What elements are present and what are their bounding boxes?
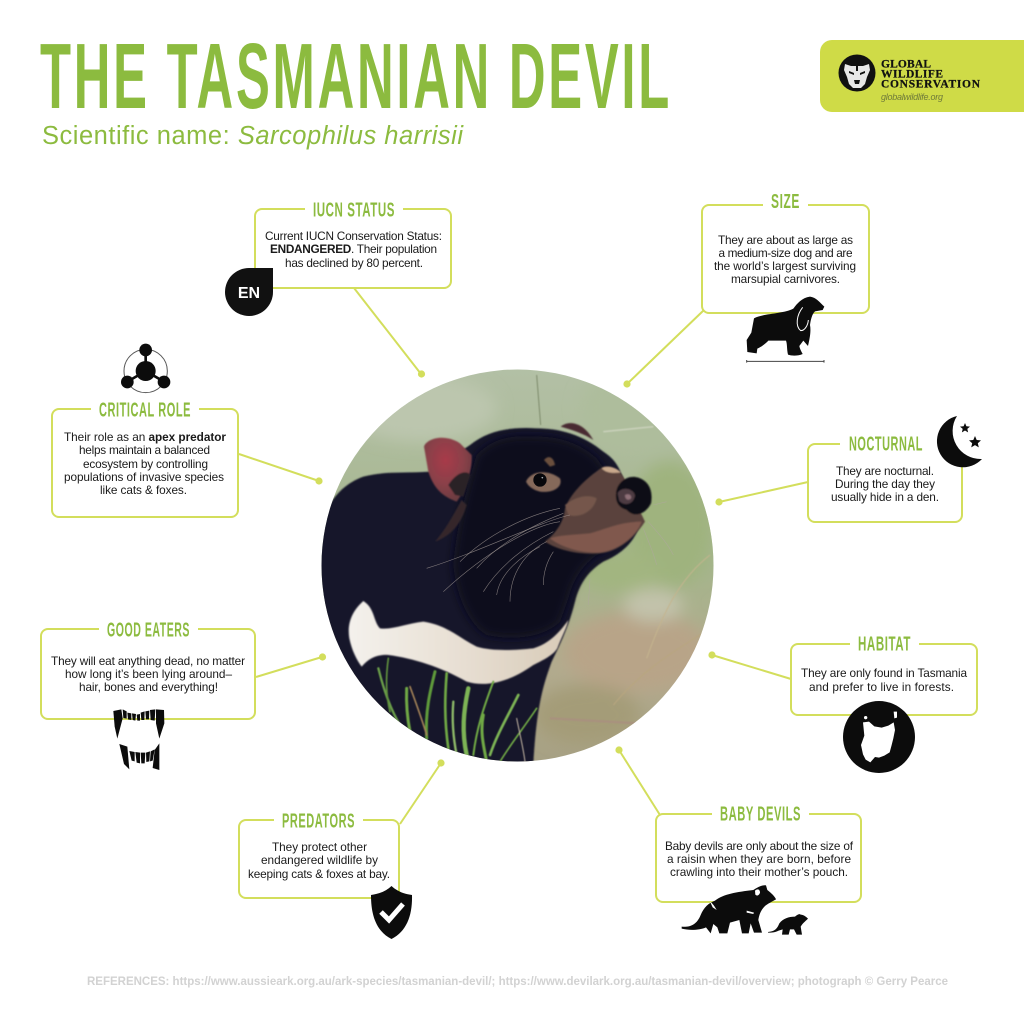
panel: IUCN status <box>225 200 451 316</box>
text: critical role: helps maintain a balanced <box>79 443 210 457</box>
connector: nocturnal <box>715 482 808 506</box>
text: critical role <box>64 430 226 497</box>
scientific name: Scientific name: Sarcophilus harrisii <box>42 122 464 150</box>
text: size: a medium-size dog and are <box>718 246 853 260</box>
logo url: globalwildlife.org <box>881 92 943 102</box>
panel: nocturnal <box>808 416 982 522</box>
background grass strands <box>537 375 710 723</box>
heading: baby devils: BABY DEVILS <box>720 804 801 826</box>
references footer: REFERENCES: https://www.aussieark.org.au/ark-species/tasmanian-devil/; https://www.devilark.org.au/tasmanian-devil/overview; photograph © Gerry Pearce <box>87 976 948 988</box>
text: baby devils <box>665 839 854 879</box>
text: predators <box>248 840 390 881</box>
neck tan <box>435 500 467 542</box>
muzzle <box>545 466 645 554</box>
text: size: the world’s largest surviving <box>714 259 856 273</box>
text: size <box>714 233 856 286</box>
panel: good eaters <box>41 619 255 770</box>
text: critical role: Their role as an apex predator <box>64 430 226 444</box>
text: IUCN status: Current IUCN Conservation Status: <box>265 229 442 243</box>
icon: EN badge: EN <box>238 285 260 302</box>
whiskers <box>427 502 673 605</box>
logo wordmark: WILDLIFE <box>881 68 943 80</box>
text: predators: keeping cats & foxes at bay. <box>248 867 390 881</box>
icon: shield with check <box>371 886 412 939</box>
icon: tiger logo <box>838 54 876 92</box>
heading: habitat: HABITAT <box>858 634 911 656</box>
eye <box>533 473 547 487</box>
icon: Tasmania map <box>843 701 915 773</box>
panel: critical role <box>52 344 238 517</box>
connector: predators <box>400 759 445 824</box>
eye patch <box>526 472 561 492</box>
text: baby devils: Baby devils are only about the size of <box>665 839 854 853</box>
text: nocturnal: During the day they <box>835 477 935 491</box>
near ear <box>424 438 472 502</box>
connector: IUCN status <box>354 288 425 378</box>
icon: adult and baby devil <box>682 885 808 935</box>
icon: moon and stars <box>937 416 982 467</box>
white chest band <box>349 601 568 684</box>
icon: fangs <box>113 709 164 770</box>
icon: EN badge <box>225 268 273 316</box>
heading: nocturnal: NOCTURNAL <box>849 434 923 456</box>
text: good eaters <box>51 654 245 694</box>
connector: critical role <box>239 454 323 485</box>
connector: good eaters <box>256 653 326 677</box>
connector: baby devils <box>615 746 660 815</box>
text: IUCN status <box>265 229 442 270</box>
text: habitat <box>801 666 967 694</box>
text: IUCN status: ENDANGERED. Their population <box>270 242 437 256</box>
text: predators: They protect other <box>272 840 367 854</box>
text: nocturnal <box>831 464 939 504</box>
connector: size <box>623 310 704 388</box>
far ear <box>561 423 593 440</box>
logo wordmark: CONSERVATION <box>881 78 981 90</box>
text: critical role: populations of invasive species <box>64 470 224 484</box>
panel: habitat <box>791 634 977 773</box>
text: IUCN status: has declined by 80 percent. <box>285 256 423 270</box>
photo: Tasmanian devil <box>320 365 720 765</box>
text: predators: endangered wildlife by <box>261 853 378 867</box>
heading: good eaters: GOOD EATERS <box>107 620 190 642</box>
heading: IUCN status: IUCN STATUS <box>313 200 395 222</box>
logo panel <box>820 40 1024 112</box>
nose <box>616 477 652 515</box>
text: good eaters: hair, bones and everything! <box>79 680 218 694</box>
text: size: They are about as large as <box>718 233 853 247</box>
text: good eaters: how long it’s been lying around– <box>65 667 232 681</box>
icon: dog <box>747 297 824 363</box>
foreground grass <box>378 658 537 762</box>
text: critical role: ecosystem by controlling <box>83 457 208 471</box>
heading: critical role: CRITICAL ROLE <box>99 400 191 422</box>
body <box>320 428 640 765</box>
text: baby devils: crawling into their mother’s pouch. <box>670 865 848 879</box>
text: habitat: and prefer to live in forests. <box>809 680 954 694</box>
head and neck shading <box>452 435 604 639</box>
text: nocturnal: usually hide in a den. <box>831 490 939 504</box>
text: good eaters: They will eat anything dead, no matter <box>51 654 245 668</box>
text: baby devils: a raisin when they are born, before <box>667 852 851 866</box>
heading: predators: PREDATORS <box>282 810 355 832</box>
icon: network <box>121 344 170 393</box>
panel: baby devils <box>656 804 861 935</box>
panel: size <box>702 191 869 363</box>
logo wordmark <box>881 58 981 90</box>
text: habitat: They are only found in Tasmania <box>801 666 967 680</box>
heading: size: SIZE <box>771 191 800 213</box>
connector: habitat <box>708 651 791 679</box>
logo wordmark: GLOBAL <box>881 58 931 70</box>
panel: predators <box>239 810 412 939</box>
text: nocturnal: They are nocturnal. <box>836 464 934 478</box>
text: size: marsupial carnivores. <box>731 272 840 286</box>
text: critical role: like cats & foxes. <box>100 483 187 497</box>
